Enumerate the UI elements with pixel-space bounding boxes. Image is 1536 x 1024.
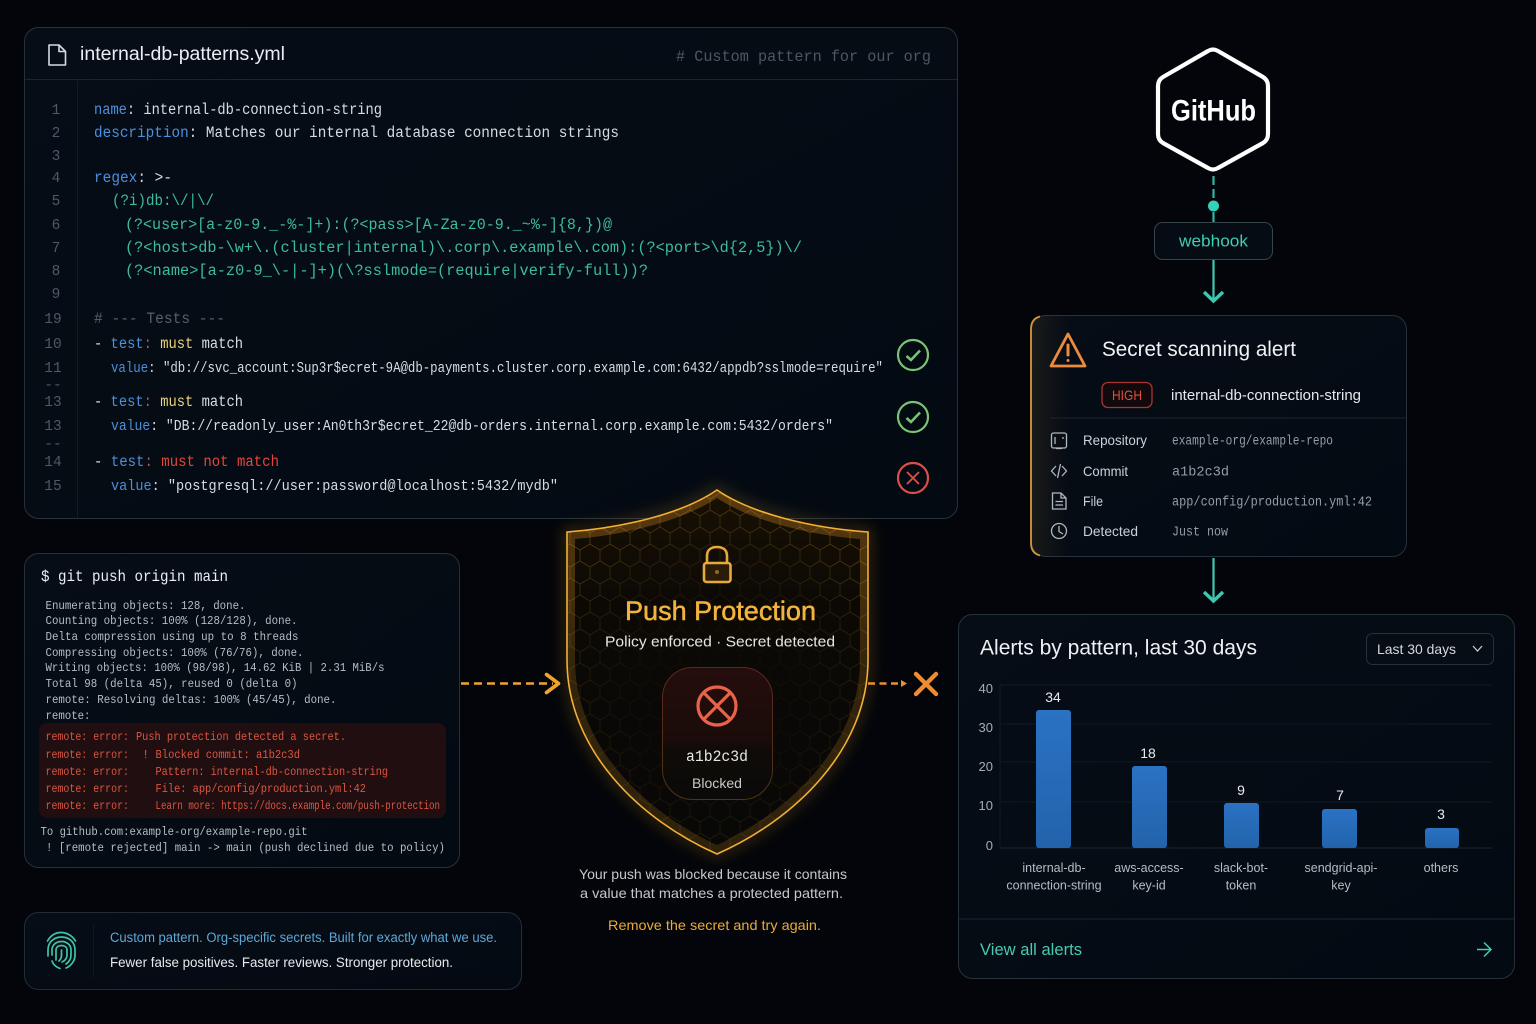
bar chart: key-id — [1132, 878, 1166, 892]
regex block: (?<name>[a-z0-9_\-|-]+)(\?sslmode=(require|verify-full))? — [125, 262, 648, 280]
rejection output — [40, 825, 445, 855]
regex block — [112, 192, 802, 280]
bar chart: aws-access- — [1114, 861, 1184, 875]
bar chart: 3 — [1437, 806, 1445, 822]
line numbers: 14 — [44, 455, 62, 471]
pattern name: internal-db-connection-string — [1171, 388, 1361, 404]
bar chart: 18 — [1140, 745, 1156, 761]
shield subtitle: Policy enforced · Secret detected — [605, 634, 835, 650]
line numbers: 5 — [52, 194, 60, 210]
tests block: value: "postgresql://user:password@localhost:5432/mydb" — [111, 479, 558, 495]
row: detected: Just now — [1172, 526, 1229, 540]
line numbers: 2 — [52, 126, 60, 142]
callout subtext: Fewer false positives. Faster reviews. Stronger protection. — [110, 955, 453, 970]
date dropdown — [1366, 634, 1494, 664]
bar chart: 20 — [979, 759, 993, 774]
tests block: value: "db://svc_account:Sup3r$ecret-9A@db-payments.cluster.corp.example.com:6432/appdb?sslmode=require" — [111, 361, 883, 377]
row: repository — [1052, 432, 1333, 450]
shield title: Push Protection — [625, 596, 816, 626]
error block: Pattern: internal-db-connection-string — [156, 765, 388, 779]
yaml metadata: name: internal-db-connection-string — [94, 101, 382, 119]
shield: push protection — [567, 490, 868, 854]
row: detected: Detected — [1083, 523, 1138, 539]
row: commit: Commit — [1083, 463, 1128, 479]
arrow: blocked outcome — [868, 674, 936, 694]
error block: File: app/config/production.yml:42 — [156, 782, 366, 796]
icon: blocked — [698, 687, 736, 725]
push output: remote: — [46, 709, 90, 723]
push output — [46, 599, 384, 723]
text: block explanation: a value that matches a protected pattern. — [580, 885, 843, 901]
error block: Push protection detected a secret. — [136, 730, 346, 744]
bar chart: 30 — [979, 720, 993, 735]
icon: fingerprint — [48, 932, 76, 968]
line numbers: 3 — [52, 149, 60, 165]
bar chart: others — [1424, 861, 1458, 875]
view all alerts link: View all alerts — [980, 941, 1082, 959]
row: file — [1052, 493, 1372, 510]
icon: test fails — [898, 463, 928, 493]
callout: custom pattern benefits — [24, 912, 522, 990]
arrow: alert to chart — [1204, 558, 1223, 601]
push output: Total 98 (delta 45), reused 0 (delta 0) — [46, 677, 298, 691]
row: commit: a1b2c3d — [1172, 464, 1229, 480]
push output: Enumerating objects: 128, done. — [46, 599, 246, 613]
text: block explanation: Remove the secret and try again. — [608, 917, 821, 933]
arrow: push to shield — [461, 674, 558, 692]
error block: remote: error: — [46, 748, 129, 762]
icon: test passes — [898, 340, 928, 370]
line numbers: 6 — [52, 218, 60, 234]
blocked label: Blocked — [692, 775, 742, 791]
webhook node — [1154, 222, 1272, 260]
yaml metadata: regex: >- — [94, 169, 172, 187]
panel: alerts by pattern chart — [958, 614, 1514, 978]
webhook node: webhook — [1178, 232, 1248, 250]
yaml metadata: description: Matches our internal database connection strings — [94, 124, 619, 142]
line numbers: 10 — [44, 337, 62, 353]
bar chart: token — [1226, 878, 1256, 892]
icon: warning — [1051, 334, 1085, 366]
error block: remote: error: — [46, 730, 129, 744]
row: detected — [1052, 523, 1229, 540]
severity badge: HIGH — [1112, 387, 1142, 403]
tests block: # --- Tests --- — [94, 310, 225, 328]
line numbers: 15 — [44, 479, 62, 495]
panel: pattern file editor — [24, 28, 958, 518]
callout text: Custom pattern. Org-specific secrets. Built for exactly what we use. — [110, 930, 497, 945]
chart title: Alerts by pattern, last 30 days — [980, 636, 1257, 660]
file name: internal-db-patterns.yml — [80, 44, 285, 65]
error block: ! — [142, 748, 149, 762]
line numbers — [44, 103, 62, 495]
header comment: # Custom pattern for our org — [676, 48, 931, 66]
tests block: - test: must match — [94, 335, 243, 353]
bar chart: 10 — [979, 798, 993, 813]
regex block: (?<host>db-\w+\.(cluster|internal)\.corp\.example\.com):(?<port>\d{2,5})\/ — [125, 239, 802, 257]
error block: remote: error: — [46, 782, 129, 796]
bar chart: 9 — [1237, 782, 1245, 798]
row: file: File — [1083, 493, 1103, 509]
text: block explanation: Your push was blocked because it contains — [579, 866, 847, 882]
panel: secret scanning alert — [1031, 316, 1406, 556]
arrow: webhook to alert — [1204, 260, 1223, 301]
push output: Writing objects: 100% (98/98), 14.62 KiB | 2.31 MiB/s — [46, 661, 384, 675]
push output: remote: Resolving deltas: 100% (45/45), done. — [46, 693, 336, 707]
tests block — [94, 310, 883, 495]
panel: git push terminal — [24, 554, 460, 868]
rejection output: To github.com:example-org/example-repo.git — [40, 825, 308, 839]
error block: remote: error: — [46, 799, 129, 813]
bar chart: connection-string — [1006, 878, 1102, 892]
row: repository: example-org/example-repo — [1172, 434, 1333, 450]
bar chart: key — [1331, 878, 1351, 892]
icon: GitHub hexagon — [1158, 50, 1268, 170]
bar chart: sendgrid-api- — [1305, 861, 1377, 875]
error block — [39, 723, 446, 818]
error block: remote: error: — [46, 765, 129, 779]
row: file: app/config/production.yml:42 — [1172, 494, 1372, 510]
bar chart: 40 — [979, 681, 993, 696]
regex block: (?i)db:\/|\/ — [112, 192, 214, 210]
bar chart: 0 — [986, 838, 993, 853]
row: repository: Repository — [1083, 432, 1147, 448]
line numbers: 7 — [52, 241, 60, 257]
connector: GitHub to webhook — [1208, 176, 1219, 222]
terminal command: $ git push origin main — [41, 568, 228, 586]
bar chart: slack-bot- — [1214, 861, 1268, 875]
blocked commit box — [662, 668, 772, 800]
commit hash: a1b2c3d — [686, 748, 748, 766]
line numbers: 9 — [52, 287, 60, 303]
line numbers: 8 — [52, 264, 60, 280]
bar chart: internal-db- — [1022, 861, 1086, 875]
error block: Blocked commit: a1b2c3d — [156, 748, 300, 762]
line numbers: 19 — [44, 312, 62, 328]
view all alerts link — [980, 941, 1491, 959]
regex block: (?<user>[a-z0-9._-%-]+):(?<pass>[A-Za-z0-9._~%-]{8,})@ — [125, 216, 612, 234]
bar chart: 7 — [1336, 787, 1344, 803]
line numbers: 13 — [44, 419, 62, 435]
tests block: - test: must not match — [94, 453, 279, 471]
date dropdown: Last 30 days — [1377, 641, 1456, 657]
bar chart: 34 — [1045, 689, 1061, 705]
yaml metadata — [94, 101, 619, 187]
icon: file — [49, 45, 66, 65]
row: commit — [1052, 463, 1229, 480]
GitHub wordmark: GitHub — [1171, 94, 1256, 128]
icon: lock — [704, 547, 730, 582]
line numbers: 13 — [44, 395, 62, 411]
push output: Delta compression using up to 8 threads — [46, 630, 298, 644]
tests block: - test: must match — [94, 393, 243, 411]
line numbers: -- — [44, 378, 62, 394]
severity badge — [1102, 382, 1152, 408]
bar chart — [979, 681, 1492, 892]
rejection output: ! [remote rejected] main -> main (push declined due to policy) — [46, 841, 445, 855]
line numbers: 4 — [52, 171, 60, 187]
push output: Counting objects: 100% (128/128), done. — [46, 614, 298, 628]
icon: test passes 2 — [898, 402, 928, 432]
line numbers: -- — [44, 437, 62, 453]
line numbers: 1 — [52, 103, 60, 119]
push output: Compressing objects: 100% (76/76), done. — [46, 646, 304, 660]
text: block explanation — [579, 866, 847, 933]
alert title: Secret scanning alert — [1102, 338, 1296, 361]
line numbers: 11 — [44, 361, 62, 377]
error block: Learn more: https://docs.example.com/push-protection — [156, 799, 440, 813]
tests block: value: "DB://readonly_user:An0th3r$ecret_22@db-orders.internal.corp.example.com:5432/orders" — [111, 419, 833, 435]
